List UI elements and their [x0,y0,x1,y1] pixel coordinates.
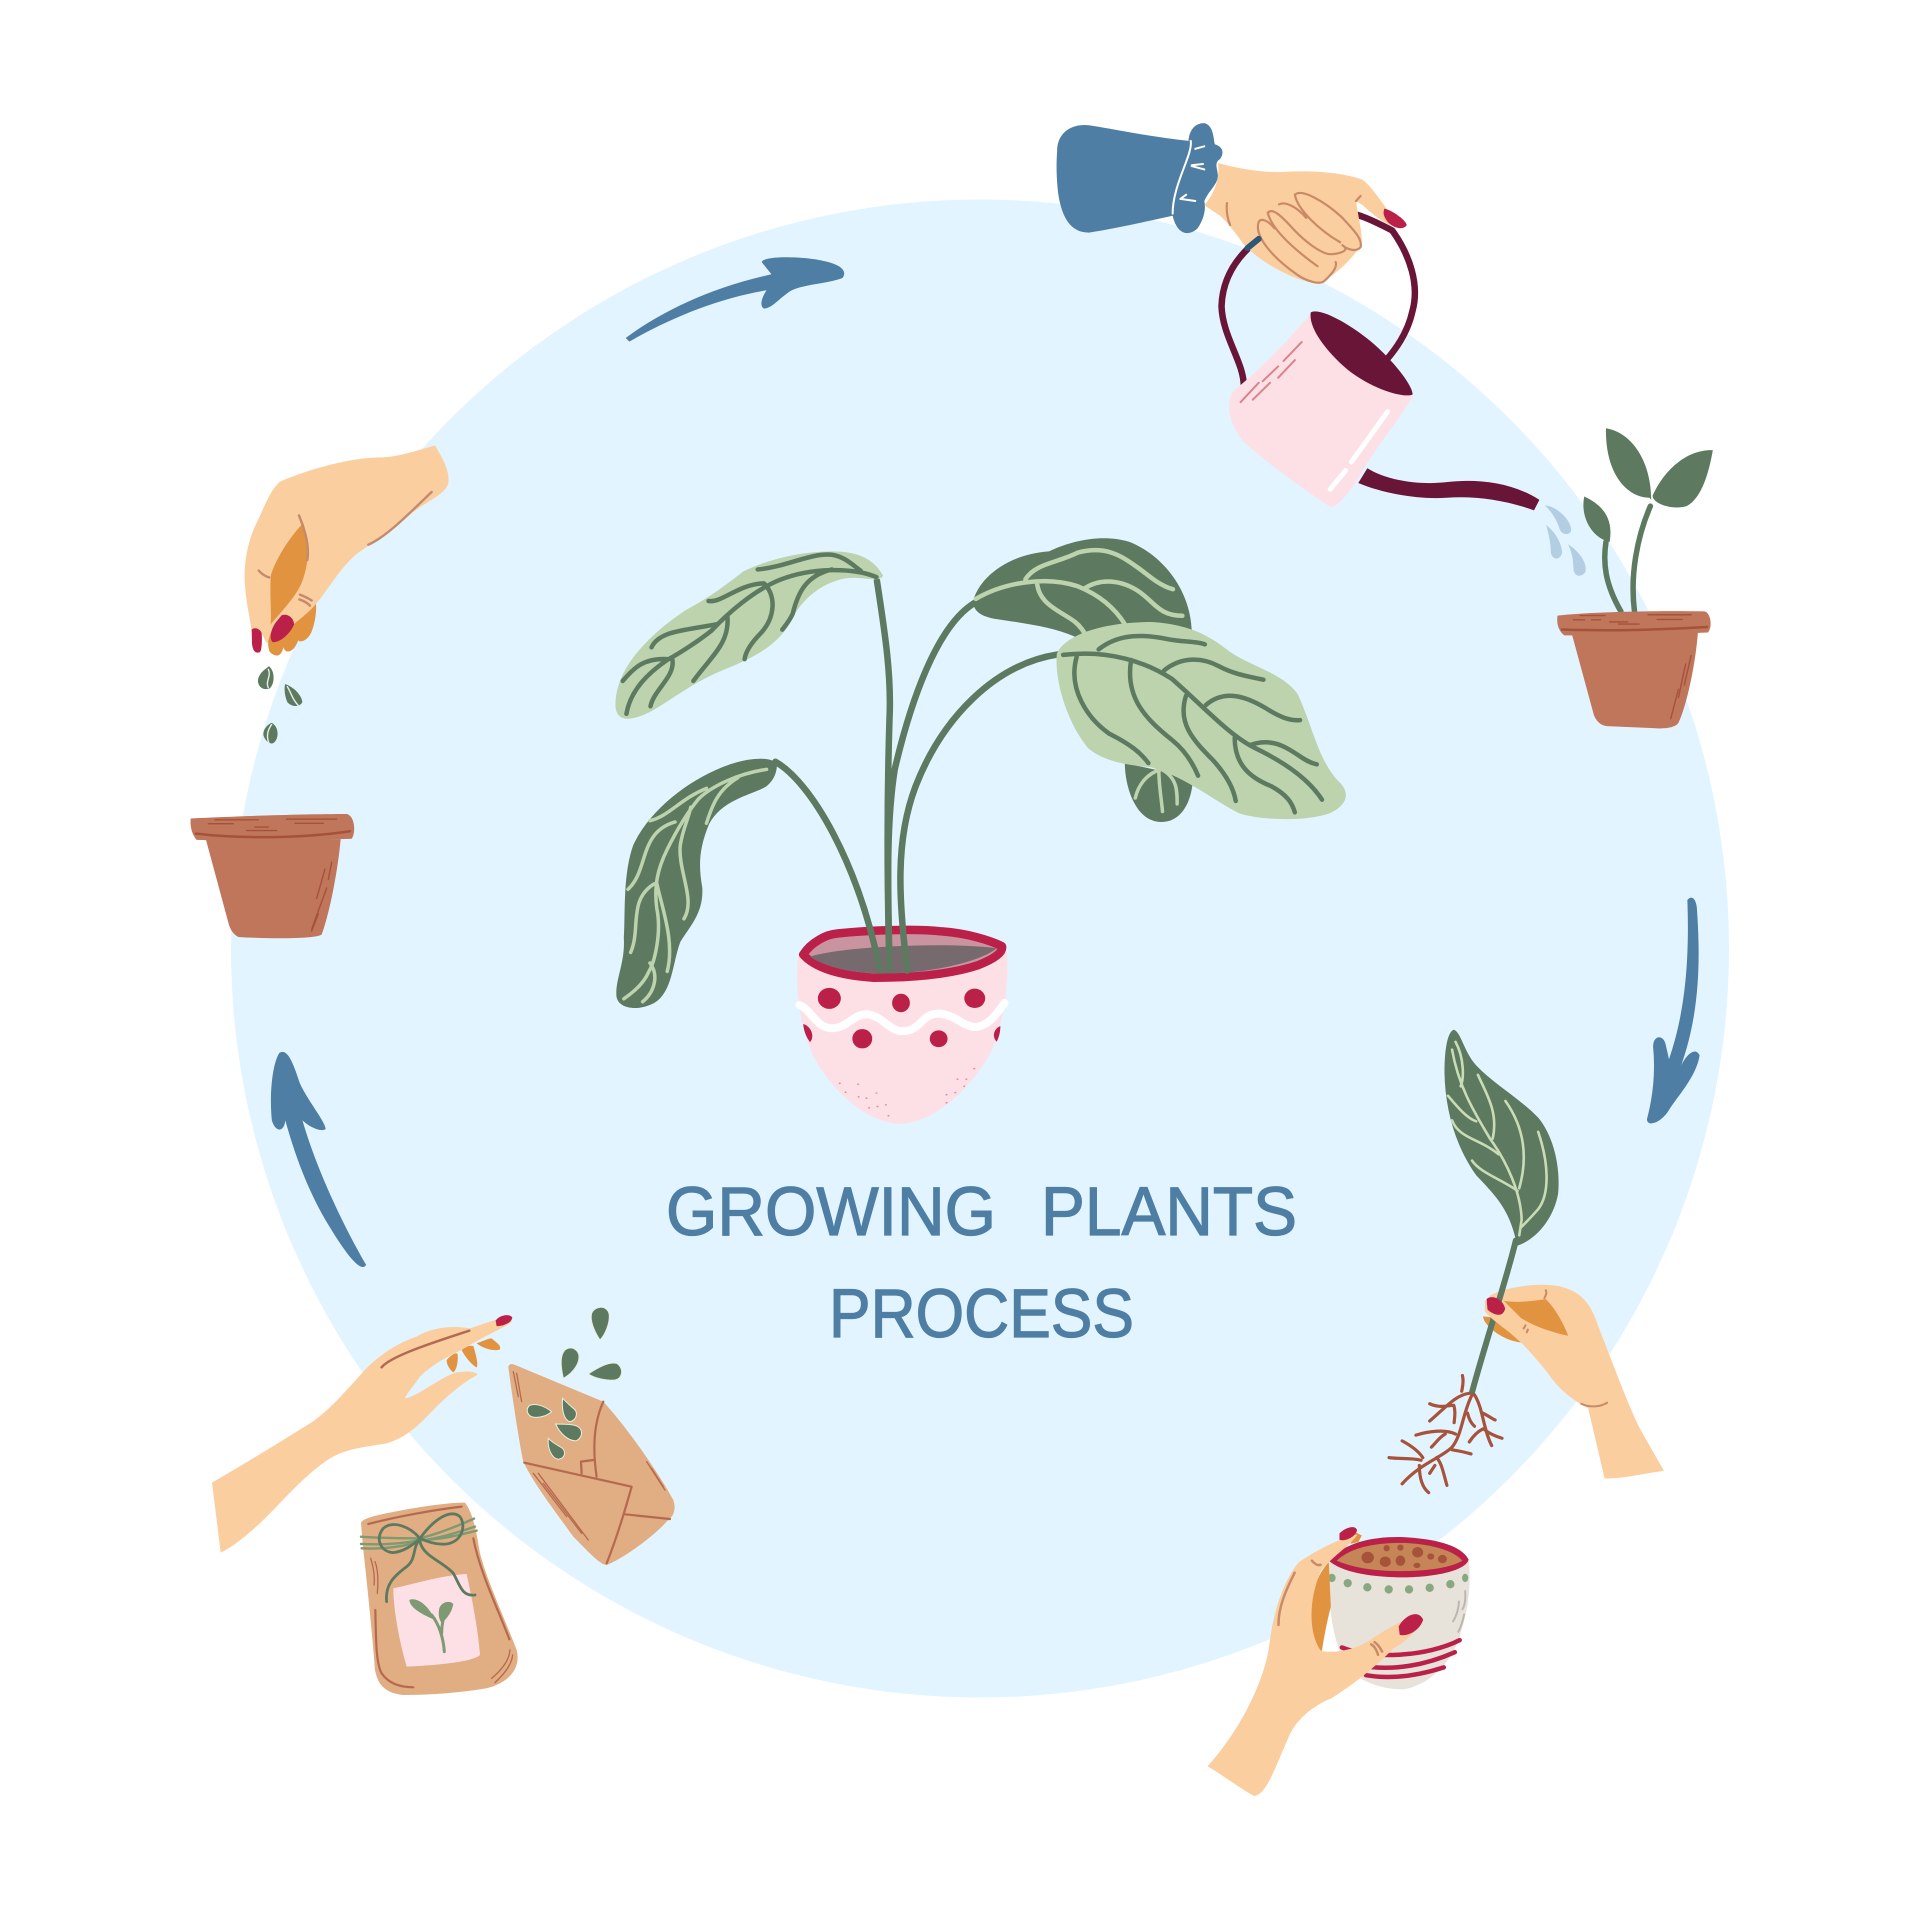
thumb and nail [1485,1297,1531,1341]
arrow: top [626,257,844,342]
red fingernails [252,615,294,653]
hand holding stem [1483,1285,1664,1479]
cup bowl [1328,1560,1470,1689]
arrow: left [271,1052,366,1267]
hand [245,445,449,644]
paper envelope [508,1364,675,1565]
terracotta pot [1557,611,1711,728]
watering can handle [1222,212,1415,384]
arrow: right [1647,898,1700,1123]
soil in cup [1337,1543,1462,1571]
watering can spout [1358,468,1539,510]
hand holding handle [1204,163,1407,283]
falling seeds [561,1307,622,1380]
big light leaf [1057,622,1346,819]
pot rim and soil [803,930,1002,978]
hand around cup [1208,1527,1423,1796]
top-right dark leaf [973,538,1192,641]
step: holding seedling with roots [1389,1030,1664,1493]
bottom-left dark leaf [616,759,777,1008]
blue sleeve [1057,123,1222,233]
cup shading [1453,1591,1465,1632]
step: watering the seedling [1057,123,1713,728]
title word: plants: PLANTS [1041,1173,1297,1250]
central potted plant [615,538,1346,1124]
seedling [1583,428,1713,611]
small dark leaf behind [1125,763,1193,822]
cup rim [1329,1537,1469,1577]
leaf with veins [1444,1030,1559,1246]
watering can body [1229,311,1413,507]
twine and bow [361,1514,477,1602]
step: hand over seed envelope and seed bag [212,1307,675,1695]
title: Growing Plants Process [666,1173,1297,1352]
pot dots [803,988,1000,1048]
water drops [1545,505,1586,576]
envelope seeds [527,1398,582,1459]
cup stripes [1342,1640,1460,1677]
stem [1472,1241,1516,1392]
dropping seeds [258,666,302,744]
soil [810,945,997,974]
seed bag [361,1503,518,1695]
top-left light leaf [615,551,883,719]
pot body [797,952,1007,1124]
step: hand dropping seeds into pot [191,445,449,938]
roots [1389,1376,1502,1493]
arm and hand [212,1315,512,1553]
step: hand holding soil cup [1208,1527,1470,1796]
bag label [393,1574,480,1667]
background circle [231,200,1729,1698]
plant stems [775,581,1058,971]
lower orange fingers [268,568,316,656]
empty terracotta pot [191,814,354,938]
title word: process: PROCESS [829,1275,1134,1352]
cup dots [1328,1574,1468,1594]
label sprout [409,1599,453,1652]
orange fingers [447,1338,500,1372]
pot wave [800,1003,1005,1031]
title word: growing: GROWING [666,1173,996,1250]
pot speckles [839,1068,975,1117]
